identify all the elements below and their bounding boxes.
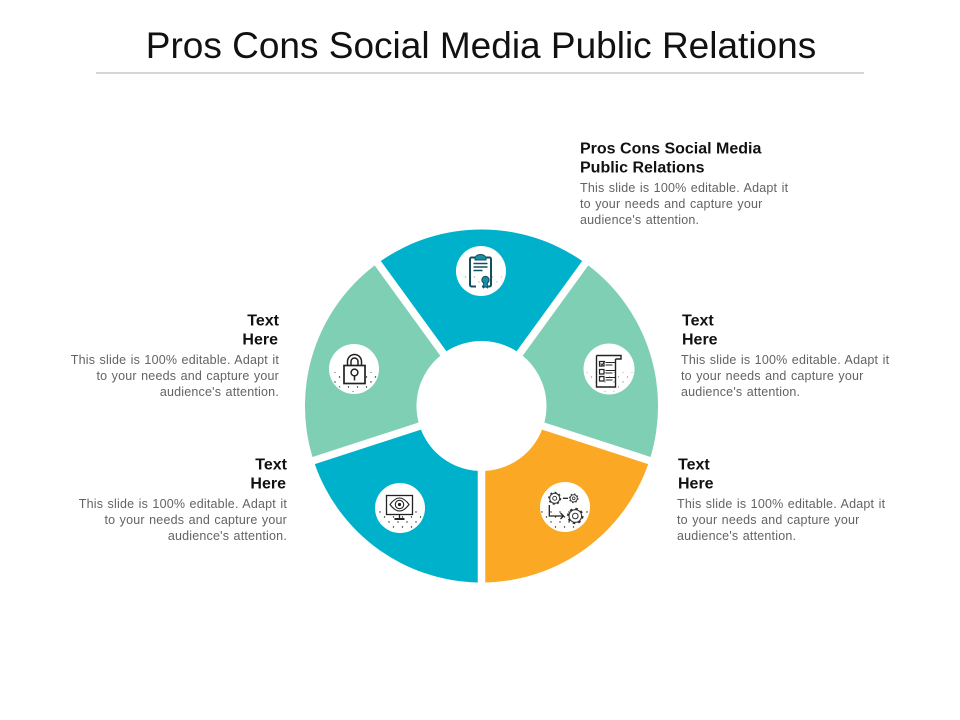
text block: bottom left: Text xyxy=(255,457,288,474)
segment: bottom right xyxy=(432,391,667,608)
text block: top: Pros Cons Social Media xyxy=(580,141,761,158)
text block: bottom left: audience's attention. xyxy=(168,529,287,543)
text block: top xyxy=(580,141,789,227)
text block: bottom right: audience's attention. xyxy=(677,529,796,543)
text block: bottom left: Here xyxy=(250,476,286,493)
icon: certificate clipboard xyxy=(456,246,506,296)
text block: bottom left: This slide is 100% editable. Adapt it xyxy=(79,497,287,511)
text block: left: Text xyxy=(247,313,280,330)
text block: bottom right xyxy=(677,457,886,543)
text block: right: audience's attention. xyxy=(681,385,800,399)
text block: left: audience's attention. xyxy=(160,385,279,399)
text block: left xyxy=(71,313,280,399)
segment: right xyxy=(502,256,681,485)
text block: top: Public Relations xyxy=(580,160,705,177)
segment: left xyxy=(282,256,461,485)
text block: right: to your needs and capture your xyxy=(681,369,864,383)
text block: right xyxy=(681,313,890,399)
text block: top: This slide is 100% editable. Adapt it xyxy=(580,181,789,195)
text block: top: audience's attention. xyxy=(580,213,699,227)
icon: padlock xyxy=(329,344,379,394)
donut chart xyxy=(282,229,681,608)
text block: bottom left: to your needs and capture your xyxy=(104,513,287,527)
text block: right: Text xyxy=(682,313,714,330)
segment: bottom left xyxy=(296,391,531,608)
title: Pros Cons Social Media Public Relations xyxy=(146,25,816,66)
text block: bottom right: Here xyxy=(678,476,714,493)
icon: monitor with eye xyxy=(375,483,425,533)
text block: right: Here xyxy=(682,332,718,349)
text block: bottom right: to your needs and capture your xyxy=(677,513,860,527)
icon: gears workflow xyxy=(540,482,590,532)
segment: top xyxy=(381,229,582,351)
text block: right: This slide is 100% editable. Adapt it xyxy=(681,353,890,367)
text block: bottom right: Text xyxy=(678,457,710,474)
text block: bottom left xyxy=(79,457,288,543)
text block: bottom right: This slide is 100% editable. Adapt it xyxy=(677,497,886,511)
text block: left: to your needs and capture your xyxy=(96,369,279,383)
text block: left: Here xyxy=(242,332,278,349)
text block: top: to your needs and capture your xyxy=(580,197,763,211)
icon: checklist document xyxy=(584,344,634,394)
text block: left: This slide is 100% editable. Adapt it xyxy=(71,353,279,367)
